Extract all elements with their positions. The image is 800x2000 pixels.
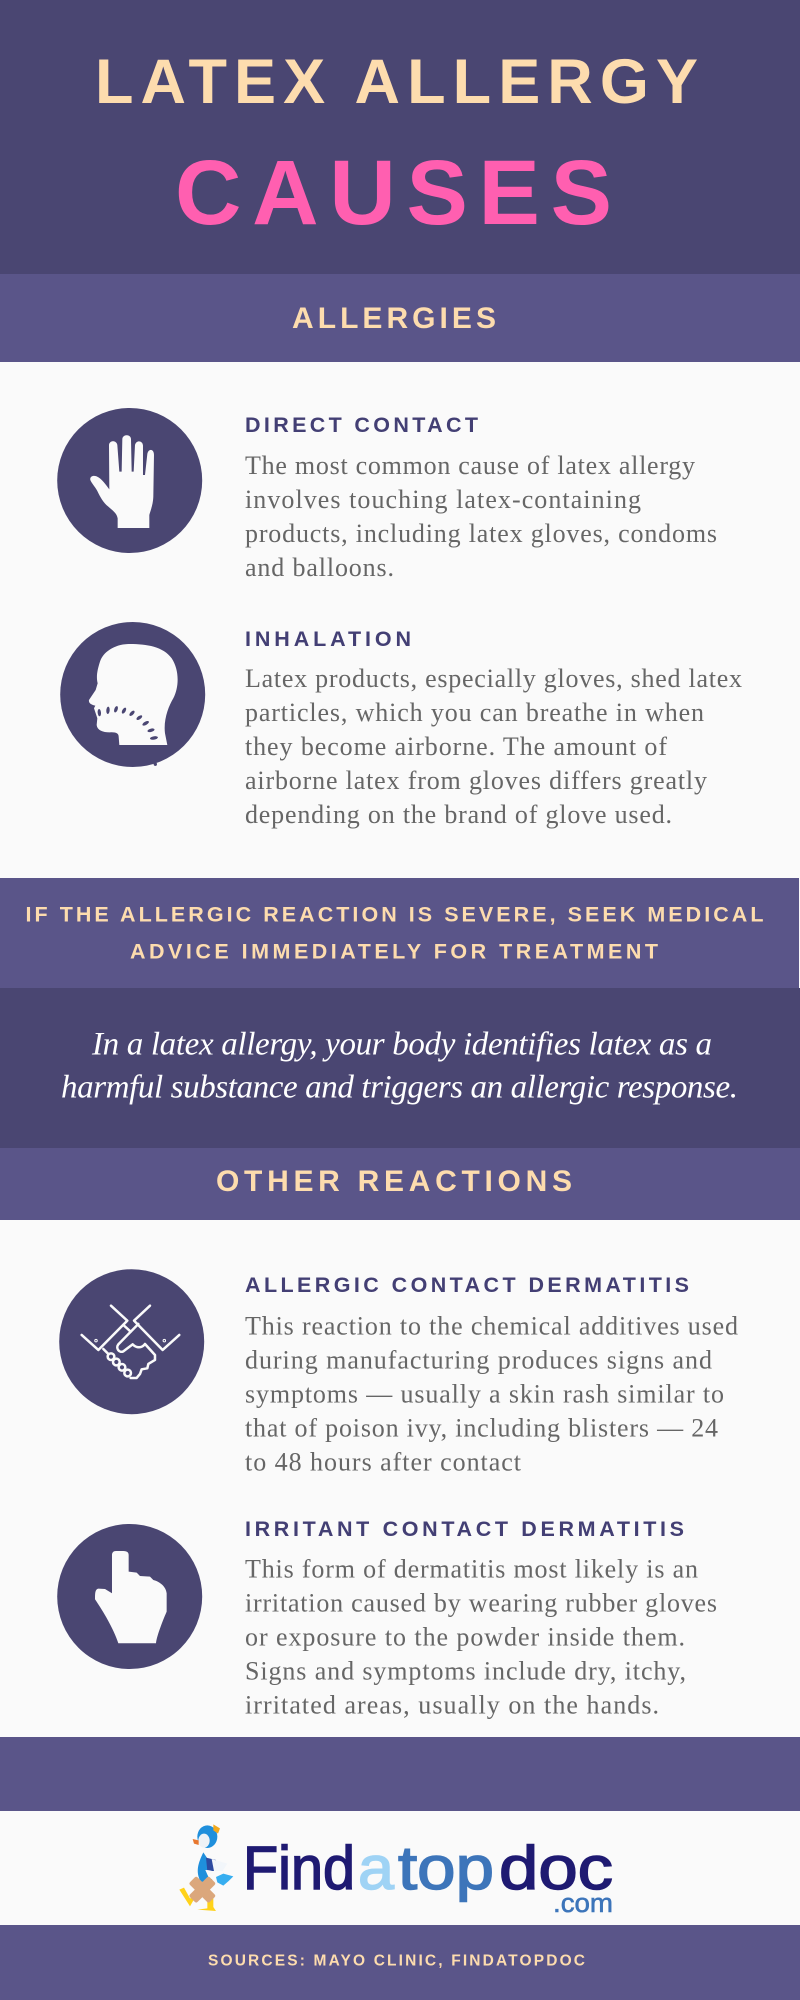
item heading: ALLERGIC CONTACT DERMATITIS — [245, 1273, 689, 1297]
item heading: INHALATION — [245, 627, 411, 651]
logo wordmark: .com — [553, 1888, 613, 1918]
logo wordmark: doc — [499, 1834, 613, 1902]
icon: raised hand — [57, 408, 202, 553]
item body: and balloons. — [245, 553, 394, 582]
footer band: sources: SOURCES: MAYO CLINIC, FINDATOPDOC — [208, 1952, 585, 1970]
item body — [245, 1554, 717, 1720]
logo wordmark: Find — [243, 1834, 355, 1902]
item body: irritation caused by wearing rubber gloves — [245, 1588, 717, 1618]
item body — [245, 1312, 738, 1476]
item body — [245, 451, 717, 582]
item body: This reaction to the chemical additives used — [245, 1312, 738, 1340]
item body: symptoms — usually a skin rash similar to — [245, 1380, 724, 1408]
item body: or exposure to the powder inside them. — [245, 1622, 685, 1652]
item: inhalation — [245, 627, 742, 829]
logo panel — [0, 1811, 800, 1925]
section banner: allergies — [0, 274, 800, 362]
item body: Latex products, especially gloves, shed latex — [245, 664, 742, 693]
icon: head profile with airway — [60, 622, 205, 767]
item body: they become airborne. The amount of — [245, 732, 667, 761]
panel: definition quote — [0, 988, 800, 1148]
icon: pointing hand — [57, 1524, 202, 1669]
spacer band — [0, 1737, 800, 1811]
panel: definition quote: harmful substance and triggers an allergic response. — [61, 1070, 738, 1106]
item body: This form of dermatitis most likely is an — [245, 1554, 698, 1584]
panel: other reactions — [0, 1220, 800, 1737]
panel: definition quote: In a latex allergy, your body identifies latex as a — [91, 1026, 712, 1062]
item body: that of poison ivy, including blisters — 24 — [245, 1414, 718, 1442]
icon: handshake — [59, 1269, 204, 1414]
item: allergic contact dermatitis — [245, 1273, 738, 1476]
item body: Signs and symptoms include dry, itchy, — [245, 1656, 686, 1686]
item body: depending on the brand of glove used. — [245, 800, 672, 829]
item: direct contact — [245, 413, 717, 582]
item body: The most common cause of latex allergy — [245, 451, 695, 480]
banner heading: ALLERGIES — [292, 302, 496, 335]
icon: bird mascot with bandage — [179, 1824, 233, 1911]
title: latex allergy: LATEX ALLERGY — [95, 47, 698, 117]
item body: irritated areas, usually on the hands. — [245, 1690, 659, 1720]
title: causes: CAUSES — [175, 142, 612, 244]
header panel — [0, 0, 800, 274]
panel: allergies — [0, 362, 800, 878]
logo wordmark: a — [358, 1834, 394, 1902]
section banner: other reactions — [0, 1148, 800, 1220]
logo wordmark — [243, 1834, 613, 1918]
callout banner: seek medical advice — [0, 878, 799, 988]
logo wordmark: top — [398, 1834, 494, 1902]
item body: to 48 hours after contact — [245, 1448, 522, 1476]
item body: involves touching latex-containing — [245, 485, 641, 514]
item body: products, including latex gloves, condoms — [245, 519, 717, 548]
item heading: IRRITANT CONTACT DERMATITIS — [245, 1517, 684, 1541]
banner heading: OTHER REACTIONS — [216, 1165, 572, 1198]
item body: airborne latex from gloves differs greatly — [245, 766, 707, 795]
footer band: sources — [0, 1925, 800, 2000]
item body: during manufacturing produces signs and — [245, 1346, 712, 1374]
callout banner: seek medical advice: ADVICE IMMEDIATELY FOR TREATMENT — [130, 940, 658, 964]
item body: particles, which you can breathe in when — [245, 698, 704, 727]
item: irritant contact dermatitis — [245, 1517, 717, 1720]
item body — [245, 664, 742, 829]
callout banner: seek medical advice: IF THE ALLERGIC REACTION IS SEVERE, SEEK MEDICAL — [26, 902, 764, 926]
item heading: DIRECT CONTACT — [245, 413, 478, 437]
